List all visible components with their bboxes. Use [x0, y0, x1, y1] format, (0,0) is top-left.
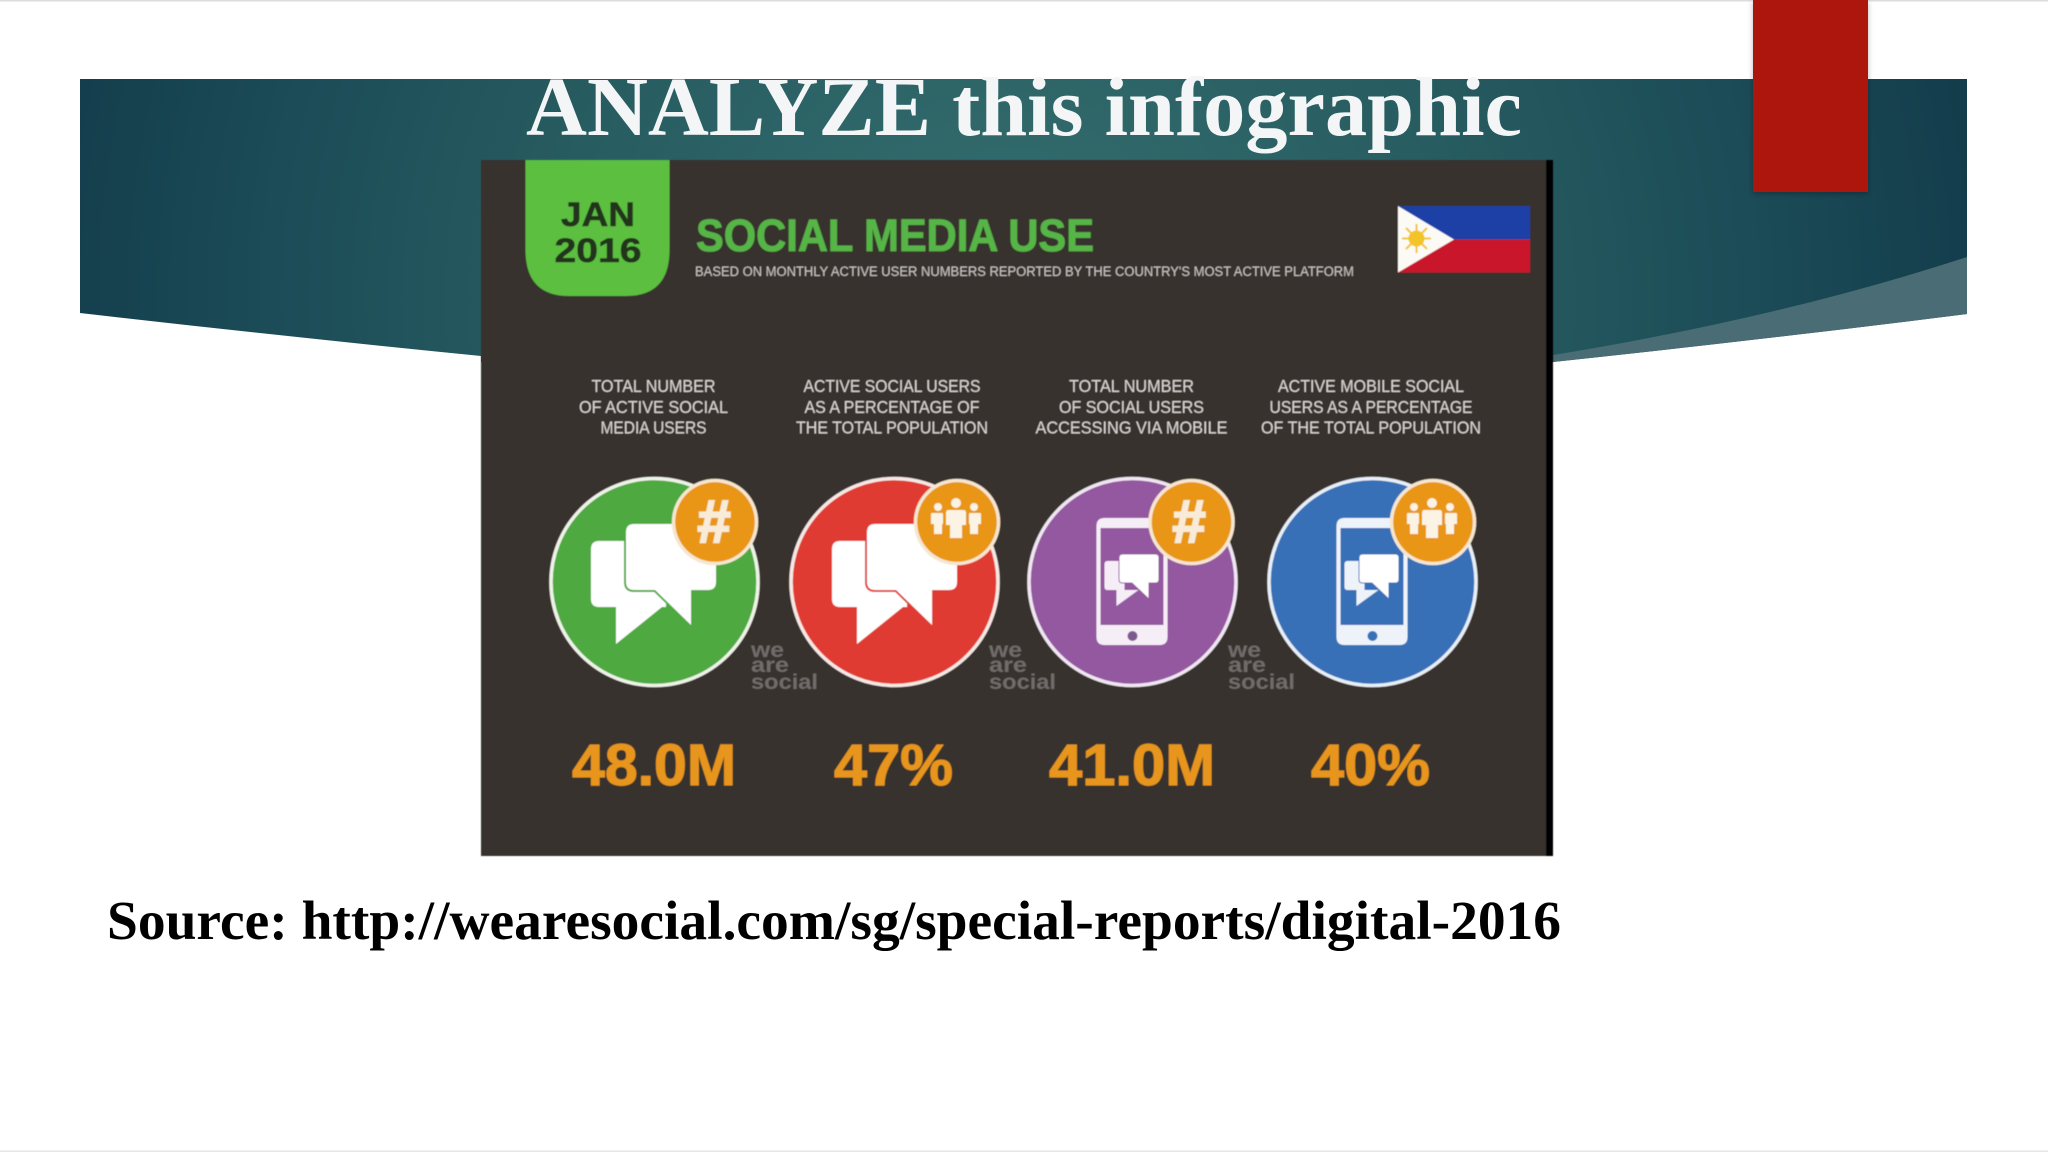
column labels: mobile users: ACCESSING VIA MOBILE — [1036, 418, 1228, 438]
panel: social media use infographic — [481, 160, 1553, 856]
logo: we are social 1: are — [751, 654, 789, 677]
title: ANALYZE this infographic — [526, 61, 1522, 154]
logo: we are social 3 — [1227, 639, 1295, 694]
column labels: total active users — [579, 376, 728, 438]
column labels: mobile users — [1036, 376, 1228, 438]
logo: we are social 3: are — [1228, 654, 1266, 677]
date tab — [526, 160, 670, 296]
column labels: total active users: TOTAL NUMBER — [592, 376, 716, 396]
logo: we are social 2: are — [989, 654, 1027, 677]
column labels: mobile percentage — [1261, 376, 1481, 438]
column labels: mobile users: OF SOCIAL USERS — [1059, 397, 1204, 417]
red bookmark ribbon — [1753, 0, 1868, 192]
logo: we are social 1: social — [751, 671, 818, 694]
date tab: 2016 — [554, 232, 642, 270]
column labels: total active users: OF ACTIVE SOCIAL — [579, 397, 728, 417]
stat: mobile percentage: 40% — [1311, 733, 1430, 798]
icon: Philippine flag — [1398, 206, 1530, 272]
logo: we are social 1 — [750, 639, 818, 694]
stat: mobile users: 41.0M — [1049, 733, 1215, 798]
panel heading: SOCIAL MEDIA USE — [696, 210, 1094, 261]
column labels: active users percentage: ACTIVE SOCIAL USERS — [804, 376, 980, 396]
icon: green speech bubbles circle: # — [697, 488, 731, 555]
stat: active users percentage: 47% — [834, 733, 953, 798]
source line: Source: http://wearesocial.com/sg/special-reports/digital-2016 — [107, 890, 1561, 951]
icon: green speech bubbles circle — [551, 478, 758, 686]
icon: blue mobile circle — [1269, 478, 1476, 686]
logo: we are social 3: social — [1228, 671, 1295, 694]
stat: total active users: 48.0M — [572, 733, 736, 798]
icon: purple mobile circle — [1029, 478, 1236, 686]
panel right edge — [1546, 160, 1553, 856]
column labels: total active users: MEDIA USERS — [600, 418, 706, 438]
column labels: active users percentage: AS A PERCENTAGE OF — [804, 397, 980, 417]
column labels: mobile users: TOTAL NUMBER — [1069, 376, 1194, 396]
column labels: mobile percentage: ACTIVE MOBILE SOCIAL — [1278, 376, 1464, 396]
panel background — [481, 160, 1553, 856]
panel subheading: BASED ON MONTHLY ACTIVE USER NUMBERS REPORTED BY THE COUNTRY'S MOST ACTIVE PLATFORM — [695, 264, 1354, 279]
column labels: active users percentage: THE TOTAL POPULATION — [796, 418, 988, 438]
column labels: mobile percentage: OF THE TOTAL POPULATION — [1261, 418, 1481, 438]
icon: red speech bubbles circle — [791, 478, 998, 686]
icon: purple mobile circle: # — [1172, 488, 1206, 555]
column labels: active users percentage — [796, 376, 988, 438]
column labels: mobile percentage: USERS AS A PERCENTAGE — [1270, 397, 1472, 417]
band accent wedge — [1553, 257, 1967, 362]
logo: we are social 3: we — [1227, 639, 1261, 662]
header band — [80, 79, 1967, 362]
logo: we are social 2: we — [988, 639, 1022, 662]
logo: we are social 1: we — [750, 639, 784, 662]
logo: we are social 2 — [988, 639, 1056, 694]
date tab: JAN — [561, 196, 635, 234]
logo: we are social 2: social — [989, 671, 1056, 694]
